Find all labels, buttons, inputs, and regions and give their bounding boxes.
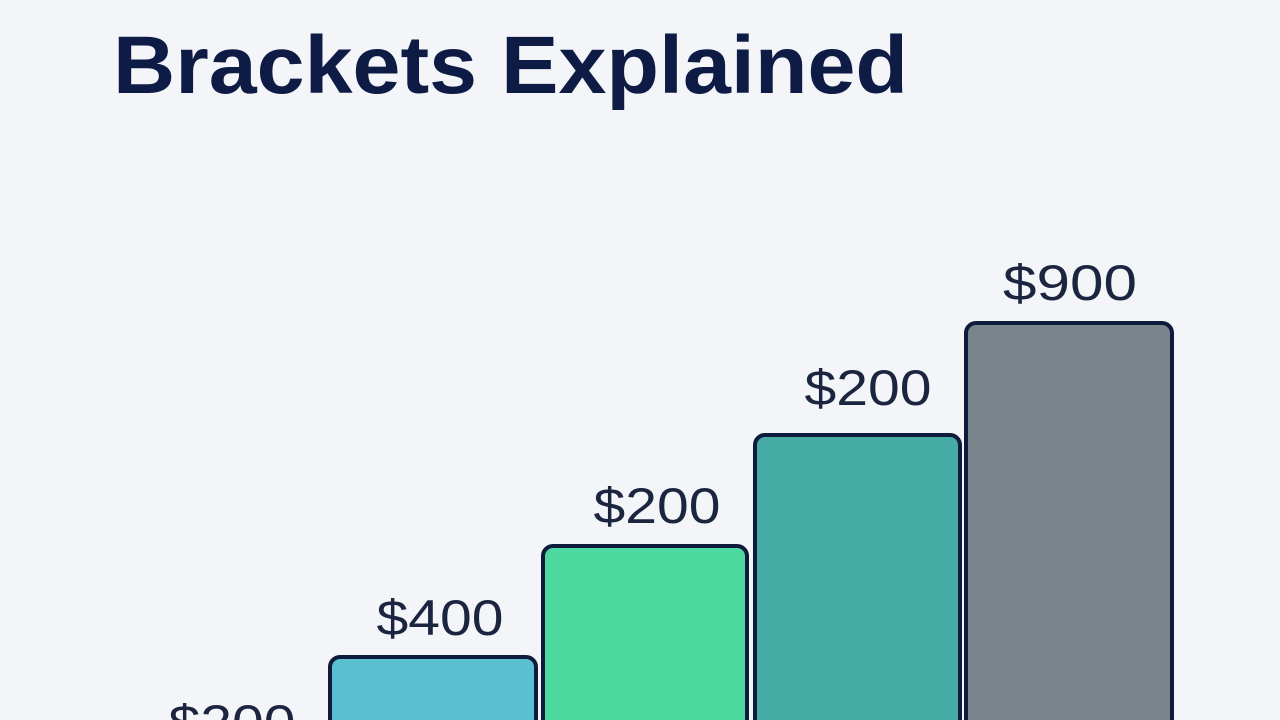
bar: $200 second: $200 — [804, 360, 932, 416]
bar: $400: $400 — [376, 590, 504, 646]
bar chart — [168, 255, 1172, 720]
bar: $200 — [543, 478, 747, 720]
bar: $900: $900 — [1003, 255, 1137, 311]
bar: $900 — [966, 255, 1172, 720]
title: Brackets Explained — [113, 20, 908, 111]
bar: $400 — [330, 590, 536, 720]
bar: $200 second — [755, 360, 960, 720]
bar: $200: $200 — [594, 478, 720, 534]
